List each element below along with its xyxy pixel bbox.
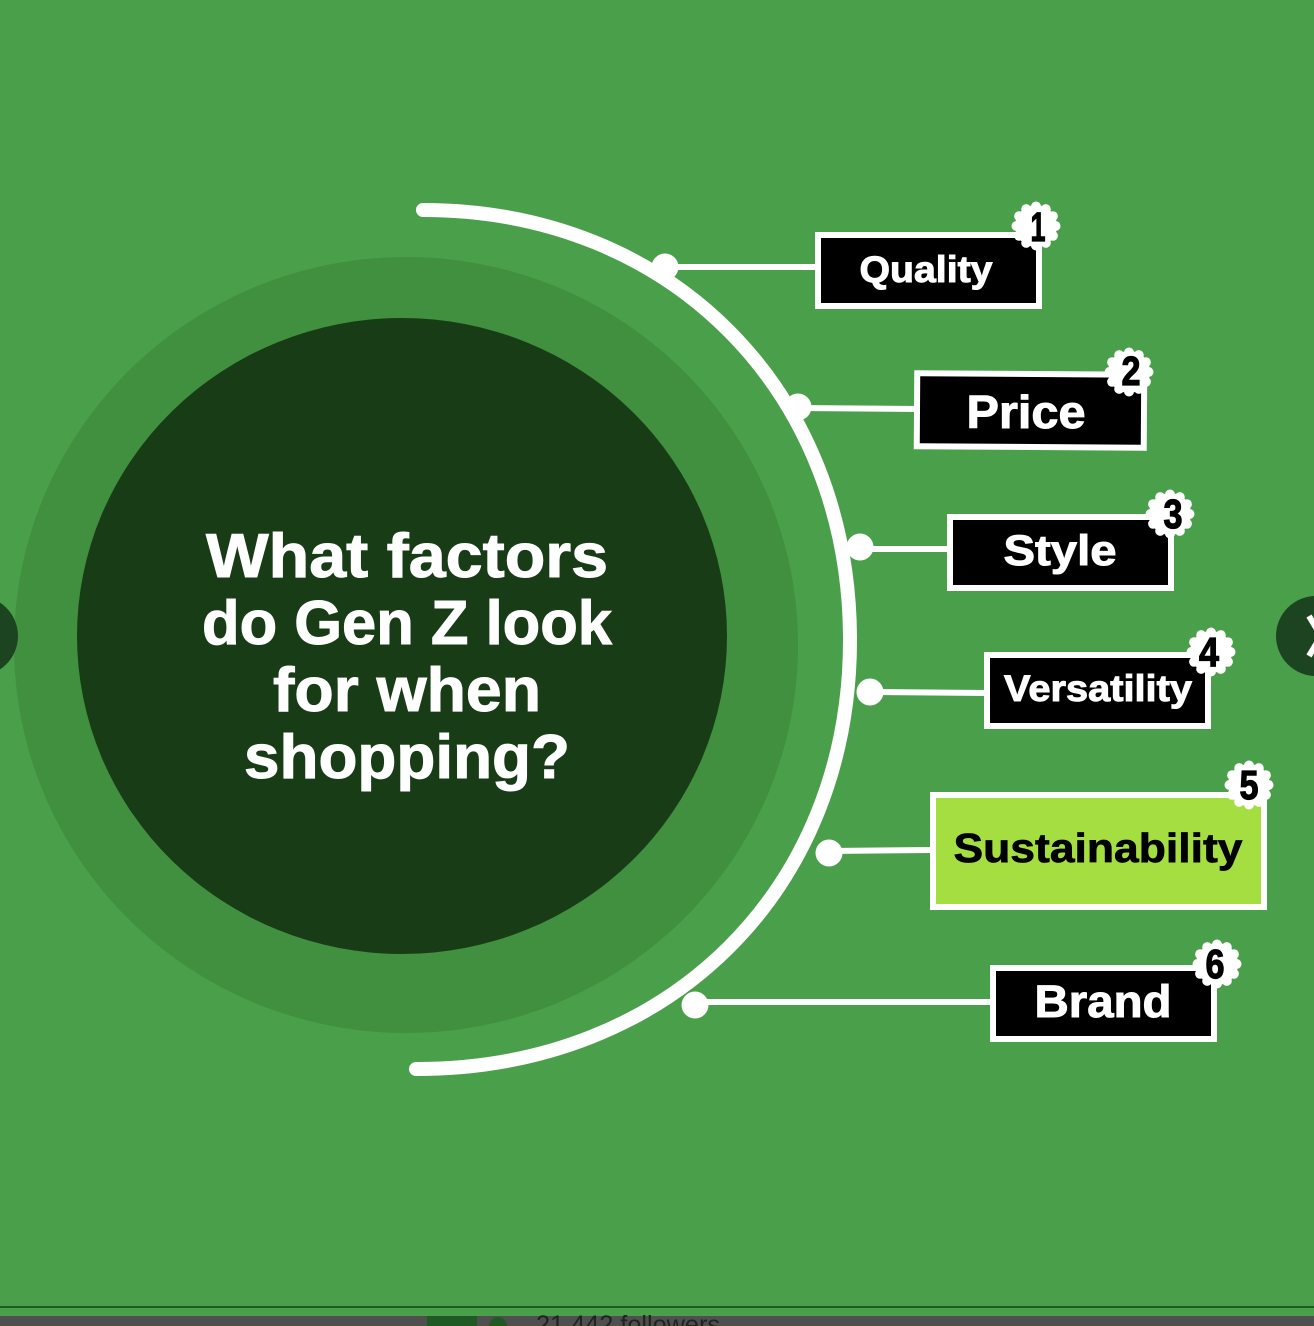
badge 2 [1104,348,1154,396]
bottom browser strip [0,1311,1314,1326]
badge 5 [1224,760,1274,810]
title: shopping? [244,723,570,792]
box: style [950,490,1194,588]
box: quality [818,202,1060,306]
badge 6: 6 [1206,941,1224,987]
title: for when [273,656,541,725]
title: What factors [206,522,608,591]
inner dark circle [77,318,727,954]
badge 3 [1146,490,1194,538]
box: sustainability [933,760,1274,907]
outer circle ring [14,257,798,1033]
badge 4: 4 [1199,629,1219,675]
badge 1: 1 [1030,204,1046,250]
white arc [416,210,850,1069]
connector: sustainability [816,840,934,866]
connector: brand [682,992,994,1018]
badge 5: 5 [1240,762,1258,808]
box: versatility: Versatility [1004,668,1192,709]
box: price: Price [966,386,1086,438]
box: versatility [987,628,1236,726]
box: sustainability: Sustainability [954,825,1243,871]
box: price [917,348,1154,448]
box: quality: Quality [860,249,993,290]
badge 6 [1192,940,1242,988]
title: do Gen Z look [202,589,613,658]
badge 3: 3 [1164,491,1182,537]
left carousel button [0,596,18,676]
right carousel button [1276,596,1314,676]
title [202,522,613,792]
connector: price [784,394,920,420]
box: brand: Brand [1034,976,1172,1027]
badge 4 [1186,628,1236,676]
connector: versatility [856,678,988,706]
bottom divider line [0,1306,1314,1308]
connector: quality [652,254,820,280]
box: brand [993,940,1242,1039]
badge 1 [1012,202,1060,250]
connector: style [846,534,950,560]
badge 2: 2 [1122,348,1140,394]
box: style: Style [1004,527,1116,575]
